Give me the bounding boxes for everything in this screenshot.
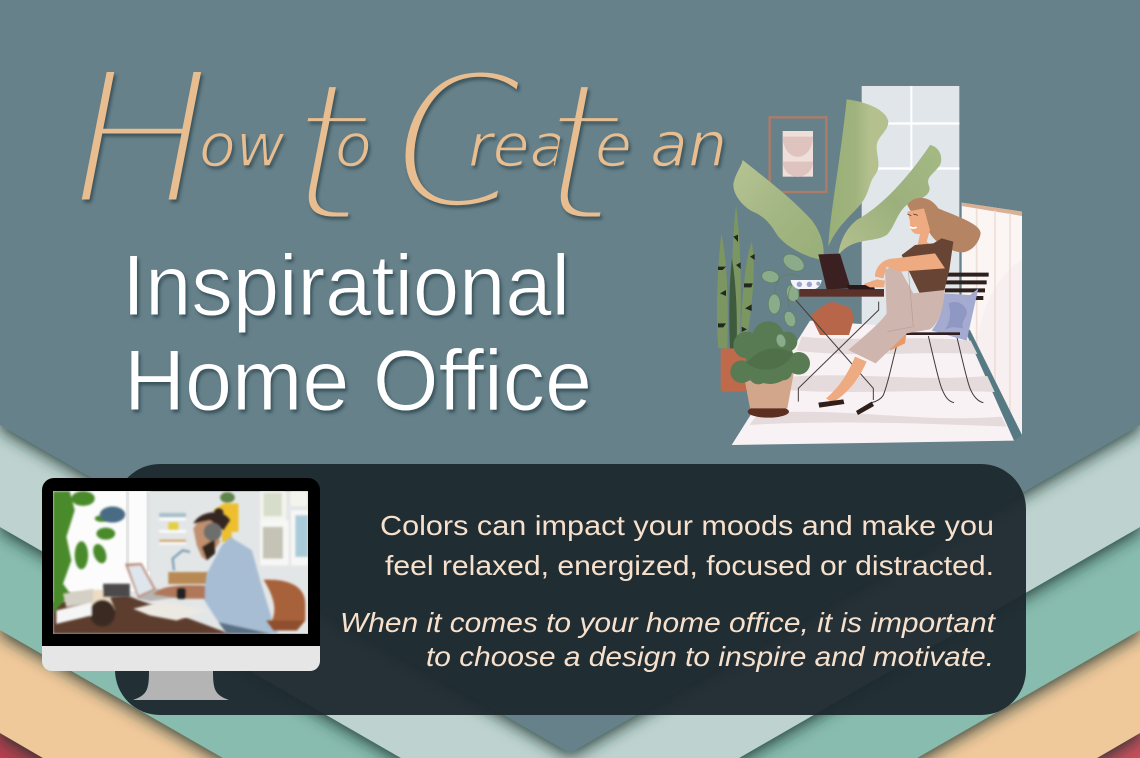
trailing plant leaves xyxy=(761,251,807,348)
panel body text xyxy=(340,510,996,672)
monitor screen photo: man with headphones at desk xyxy=(53,491,308,634)
potted plant xyxy=(730,321,810,418)
monitor xyxy=(42,478,320,700)
illustration: woman working on balcony xyxy=(717,86,1022,445)
title: script line: o xyxy=(335,111,372,181)
monitor stand xyxy=(133,671,229,700)
chair xyxy=(872,273,989,403)
title: script line: ow xyxy=(199,111,286,181)
title: script line: an xyxy=(650,108,727,181)
man xyxy=(153,508,279,634)
table xyxy=(796,289,884,402)
title: script line: e xyxy=(595,111,632,181)
title: script line: H xyxy=(70,29,213,250)
title: script line: t xyxy=(540,37,625,270)
title: script line: rea xyxy=(468,111,566,181)
big banana leaves xyxy=(733,99,941,260)
title: main heading xyxy=(122,238,592,429)
blurred plant xyxy=(53,491,115,614)
roll and papers xyxy=(56,584,207,627)
panel body text: Colors can impact your moods and make you xyxy=(380,510,994,541)
panel body text: When it comes to your home office, it is important xyxy=(340,607,996,638)
framed picture xyxy=(770,117,826,192)
bowl xyxy=(791,280,822,291)
rug xyxy=(732,321,1014,445)
panel body text: feel relaxed, energized, focused or distracted. xyxy=(385,550,994,581)
monitor bezel xyxy=(42,478,320,646)
title: main heading: Inspirational xyxy=(122,238,570,334)
terracotta storage box xyxy=(811,302,854,335)
panel body text: to choose a design to inspire and motivate. xyxy=(426,641,994,672)
title: script line: C xyxy=(392,32,525,253)
woman xyxy=(818,198,981,415)
chair xyxy=(264,580,305,631)
shelves and lamp xyxy=(159,492,238,584)
desk xyxy=(53,595,230,634)
wall pictures xyxy=(260,491,308,565)
snake plant and terracotta pot xyxy=(717,205,755,392)
window xyxy=(862,86,959,329)
title: script line: t xyxy=(288,37,373,270)
monitor chin xyxy=(42,640,320,671)
laptop xyxy=(818,254,875,289)
laptop xyxy=(125,563,178,601)
balcony railing xyxy=(962,203,1022,441)
dark text panel xyxy=(115,464,1026,715)
title: main heading: Home Office xyxy=(124,333,592,429)
